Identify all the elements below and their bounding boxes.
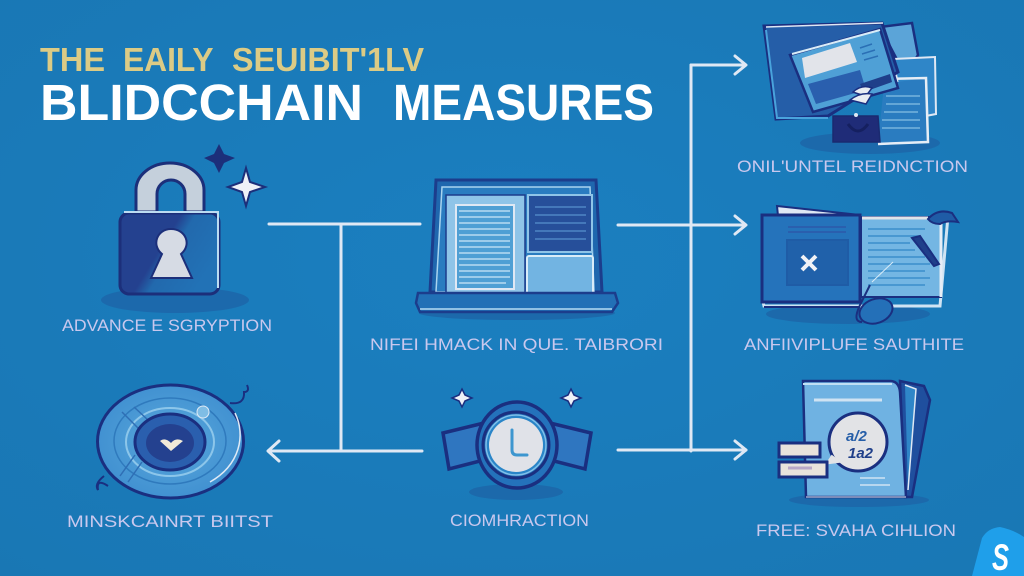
connector lines right <box>618 56 746 459</box>
icon: dark sparkle <box>204 144 235 173</box>
icon: document stack with speech bubble: 1a2 <box>848 445 874 462</box>
title line 1: EAILY <box>123 41 214 78</box>
title line 1: SEUIBIT'1LV <box>232 41 424 78</box>
label: disc: MINSKCAINRT BIITST <box>67 512 273 531</box>
icon: sparkle right <box>561 389 581 407</box>
icon: document stack with speech bubble: a/2 <box>846 428 868 445</box>
icon: disc <box>97 385 248 498</box>
icon: watch <box>443 389 591 500</box>
icon: laptop with documents <box>416 180 618 320</box>
title <box>40 41 654 131</box>
icon: padlock <box>101 144 265 313</box>
icon: open book with pin <box>762 206 958 328</box>
title line 2: BLIDCCHAIN <box>40 74 363 131</box>
label: advance encryption: ADVANCE E SGRYPTION <box>62 316 272 335</box>
label: book: ANFIIVIPLUFE SAUTHITE <box>744 335 964 354</box>
icon: logo badge <box>972 527 1024 576</box>
icon: document stack with speech bubble <box>779 381 930 507</box>
label: tablet: ONIL'UNTEL REIDNCTION <box>737 157 968 176</box>
label: middle: NIFEI HMACK IN QUE. TAIBRORI <box>370 335 663 354</box>
icon: white sparkle <box>228 168 265 206</box>
connector lines left <box>268 224 422 461</box>
label: documents: FREE: SVAHA CIHLION <box>756 521 956 540</box>
title line 1: THE <box>40 41 105 78</box>
icon: tablet and documents stack <box>764 23 940 154</box>
label: watch: CIOMHRACTION <box>450 511 589 530</box>
icon: sparkle left <box>452 389 472 407</box>
title line 2: MEASURES <box>393 74 654 131</box>
